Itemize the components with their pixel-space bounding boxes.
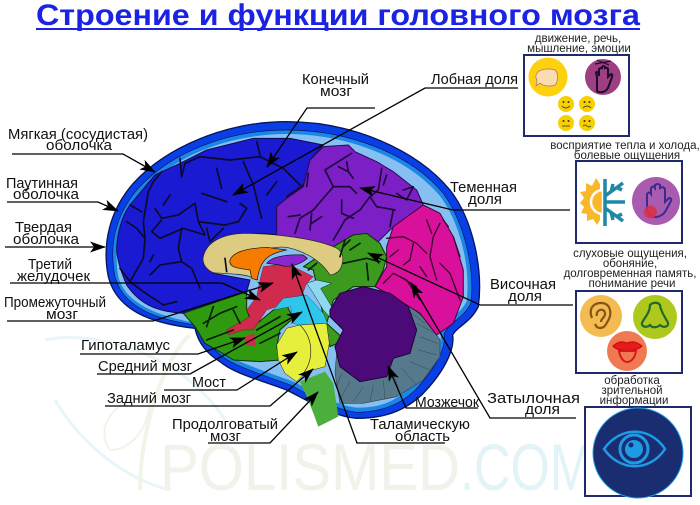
caption: понимание речи bbox=[589, 278, 675, 290]
frontal lobe bbox=[117, 138, 323, 313]
icon: sun and snowflake bbox=[580, 178, 625, 226]
panel: parietal lobe functions bbox=[550, 140, 700, 243]
label: midbrain: Средний мозг bbox=[98, 359, 192, 375]
icon: hand with pain point bbox=[632, 177, 680, 225]
label: dura mater: оболочка bbox=[13, 232, 80, 248]
label: medulla bbox=[172, 417, 278, 445]
label: hypothalamus: Гипоталамус bbox=[81, 338, 170, 354]
orange region bbox=[230, 247, 287, 280]
label: thalamic region: Таламическую bbox=[370, 417, 470, 433]
upper green region bbox=[303, 233, 387, 347]
watermark bbox=[45, 335, 592, 504]
label: arachnoid membrane: оболочка bbox=[13, 187, 80, 203]
hypothalamus red bbox=[243, 333, 256, 347]
label: medulla: мозг bbox=[210, 429, 241, 445]
label: dura mater bbox=[13, 220, 80, 248]
label: soft membrane: оболочка bbox=[46, 138, 113, 154]
watermark: .COM bbox=[460, 430, 592, 504]
cerebellum fan bbox=[335, 303, 440, 403]
label: temporal lobe: Височная bbox=[490, 277, 556, 293]
label: occipital lobe bbox=[487, 391, 580, 418]
label: frontal lobe: Лобная доля bbox=[431, 72, 518, 88]
label: hindbrain: Задний мозг bbox=[107, 391, 191, 407]
icon: ear bbox=[580, 295, 622, 337]
label: occipital lobe: доля bbox=[525, 402, 560, 418]
label: telencephalon: мозг bbox=[320, 84, 352, 100]
parietal lobe bbox=[277, 145, 423, 247]
cerebellum purple bbox=[330, 287, 417, 382]
icon: tongue bbox=[607, 331, 647, 371]
label: dura mater: Твердая bbox=[15, 220, 72, 236]
red thalamus bbox=[227, 263, 313, 335]
small purple region bbox=[267, 255, 307, 266]
caption bbox=[600, 375, 668, 407]
panel: occipital lobe functions bbox=[585, 375, 691, 498]
watermark: POLISMED bbox=[160, 430, 460, 504]
label: parietal lobe: доля bbox=[468, 192, 502, 208]
label: third ventricle: Третий bbox=[28, 257, 72, 273]
sulci bbox=[120, 142, 300, 305]
lower green region bbox=[183, 292, 293, 362]
caption: движение, речь, bbox=[535, 33, 621, 45]
brain illustration bbox=[106, 122, 480, 427]
label: pons: Мост bbox=[192, 375, 226, 391]
icon: eye bbox=[593, 408, 683, 498]
label: diencephalon: Промежуточный bbox=[4, 295, 106, 311]
label: parietal lobe bbox=[450, 180, 517, 208]
caption: долговременная память, bbox=[564, 268, 696, 280]
caption: мышление, эмоции bbox=[527, 43, 631, 55]
label: telencephalon: Конечный bbox=[302, 72, 369, 88]
label: arachnoid membrane: Паутинная bbox=[6, 176, 78, 192]
caption: обоняние, bbox=[603, 258, 657, 270]
medulla green bbox=[300, 372, 338, 427]
label: occipital lobe: Затылочная bbox=[487, 391, 580, 407]
caption bbox=[527, 33, 631, 55]
icon: speech bubble bbox=[528, 58, 568, 96]
caption: болевые ощущения bbox=[574, 150, 680, 162]
label: temporal lobe: доля bbox=[508, 289, 542, 305]
label: cerebellum: Мозжечок bbox=[415, 395, 480, 411]
caption: слуховые ощущения, bbox=[573, 248, 687, 260]
caption: восприятие тепла и холода, bbox=[550, 140, 700, 152]
caption: обработка bbox=[604, 375, 660, 387]
temporal/occipital magenta lobe bbox=[375, 205, 463, 335]
caption: информации bbox=[600, 395, 668, 407]
panel: temporal lobe functions bbox=[564, 248, 696, 373]
labels with leader lines bbox=[4, 72, 580, 445]
caption bbox=[550, 140, 700, 162]
label: medulla: Продолговатый bbox=[172, 417, 278, 433]
leader lines and arrows bbox=[5, 88, 576, 443]
label: diencephalon: мозг bbox=[46, 307, 78, 323]
label: telencephalon bbox=[302, 72, 369, 100]
label: third ventricle bbox=[17, 257, 91, 285]
corpus callosum bbox=[203, 233, 343, 280]
label: temporal lobe bbox=[490, 277, 556, 305]
label: thalamic region: область bbox=[395, 429, 450, 445]
panel: frontal lobe functions bbox=[524, 33, 631, 136]
label: thalamic region bbox=[370, 417, 470, 445]
skull and meninges bbox=[106, 122, 480, 418]
icon: nose bbox=[633, 295, 677, 339]
caption: зрительной bbox=[601, 385, 663, 397]
midbrain cyan bbox=[273, 295, 327, 327]
label: third ventricle: желудочек bbox=[17, 269, 91, 285]
label: diencephalon bbox=[4, 295, 106, 323]
label: soft membrane: Мягкая (сосудистая) bbox=[8, 127, 148, 143]
caption bbox=[564, 248, 696, 290]
label: soft membrane bbox=[8, 127, 148, 154]
light aqueduct bbox=[307, 280, 332, 317]
icon: hand in motion bbox=[585, 59, 621, 95]
label: arachnoid membrane bbox=[6, 176, 80, 203]
icon: emoji set bbox=[558, 96, 595, 131]
pons yellow bbox=[277, 323, 329, 382]
label: parietal lobe: Теменная bbox=[450, 180, 517, 196]
